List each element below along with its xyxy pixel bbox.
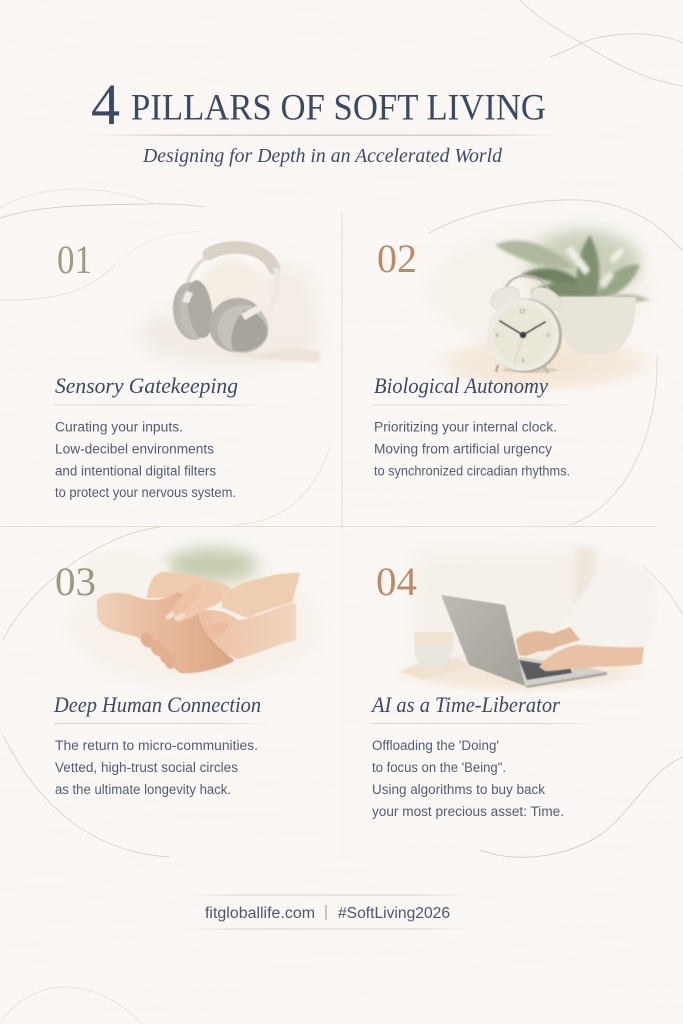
body text: Curating your inputs. — [55, 420, 183, 434]
fingers on top — [166, 584, 201, 618]
body text — [374, 420, 570, 478]
icon: alarm clock: 12 — [519, 309, 525, 315]
number 02: 02 — [377, 236, 417, 281]
title — [91, 72, 546, 137]
heading rule — [371, 723, 601, 724]
icon: laptop — [441, 595, 607, 688]
left forearm and hand — [97, 592, 234, 673]
body text: The return to micro-communities. — [55, 738, 258, 753]
body text: to focus on the 'Being". — [372, 760, 506, 775]
subtitle: Designing for Depth in an Accelerated World — [142, 145, 503, 167]
body text: Vetted, high-trust social circles — [55, 760, 238, 775]
number 03: 03 — [55, 559, 96, 604]
back hand — [147, 572, 231, 598]
body text: as the ultimate longevity hack. — [55, 782, 231, 797]
body text — [372, 738, 564, 819]
title rule — [90, 134, 560, 136]
icon: hands on keyboard — [516, 627, 644, 671]
photo: clasped hands — [70, 548, 320, 687]
footer: #SoftLiving2026 — [338, 905, 450, 922]
number 04: 04 — [376, 559, 417, 604]
body text: your most precious asset: Time. — [372, 804, 564, 819]
lower fingers — [138, 630, 177, 670]
title: 4 — [91, 72, 120, 137]
lower right forearm and hand — [197, 603, 296, 659]
heading: Sensory Gatekeeping — [55, 373, 238, 398]
panel: 04 ai as a time-liberator — [370, 548, 657, 819]
body text: to protect your nervous system. — [55, 485, 236, 500]
footer — [182, 894, 478, 930]
icon: alarm clock: 9 — [495, 333, 499, 339]
body text: Using algorithms to buy back — [372, 782, 545, 797]
body text — [55, 738, 258, 797]
icon: alarm clock: 6 — [521, 358, 525, 364]
body text: and intentional digital filters — [55, 464, 216, 478]
photo: alarm clock and plant — [425, 230, 665, 394]
body text: to synchronized circadian rhythms. — [374, 464, 570, 478]
title: PILLARS OF SOFT LIVING — [131, 88, 546, 128]
icon: shirt sleeve — [559, 555, 657, 650]
heading rule — [54, 723, 276, 724]
body text — [55, 420, 236, 500]
heading: Biological Autonomy — [374, 373, 548, 398]
panel: 02 biological autonomy — [373, 230, 665, 478]
body text: Moving from artificial urgency — [374, 442, 552, 456]
heading: Deep Human Connection — [53, 692, 261, 717]
heading rule — [373, 404, 583, 406]
heading rule — [54, 404, 266, 406]
panel: 01 sensory gatekeeping — [54, 237, 322, 500]
thumb — [203, 622, 228, 635]
upper right forearm — [222, 573, 300, 618]
body text: Offloading the 'Doing' — [372, 738, 499, 753]
icon: headphones on blanket — [138, 247, 322, 367]
icon: plant — [495, 230, 650, 354]
body text: Low-decibel environments — [55, 442, 214, 456]
icon: coffee cup on book — [400, 632, 466, 680]
grid dividers — [0, 213, 656, 857]
heading: AI as a Time-Liberator — [370, 692, 560, 717]
photo: laptop on table — [385, 548, 657, 694]
icon: alarm clock: 3 — [546, 333, 550, 339]
body text: Prioritizing your internal clock. — [374, 420, 557, 434]
panel: 03 deep human connection — [53, 548, 320, 797]
number 01: 01 — [57, 237, 92, 282]
icon: alarm clock — [487, 276, 565, 373]
footer: fitgloballife.com — [205, 905, 315, 922]
